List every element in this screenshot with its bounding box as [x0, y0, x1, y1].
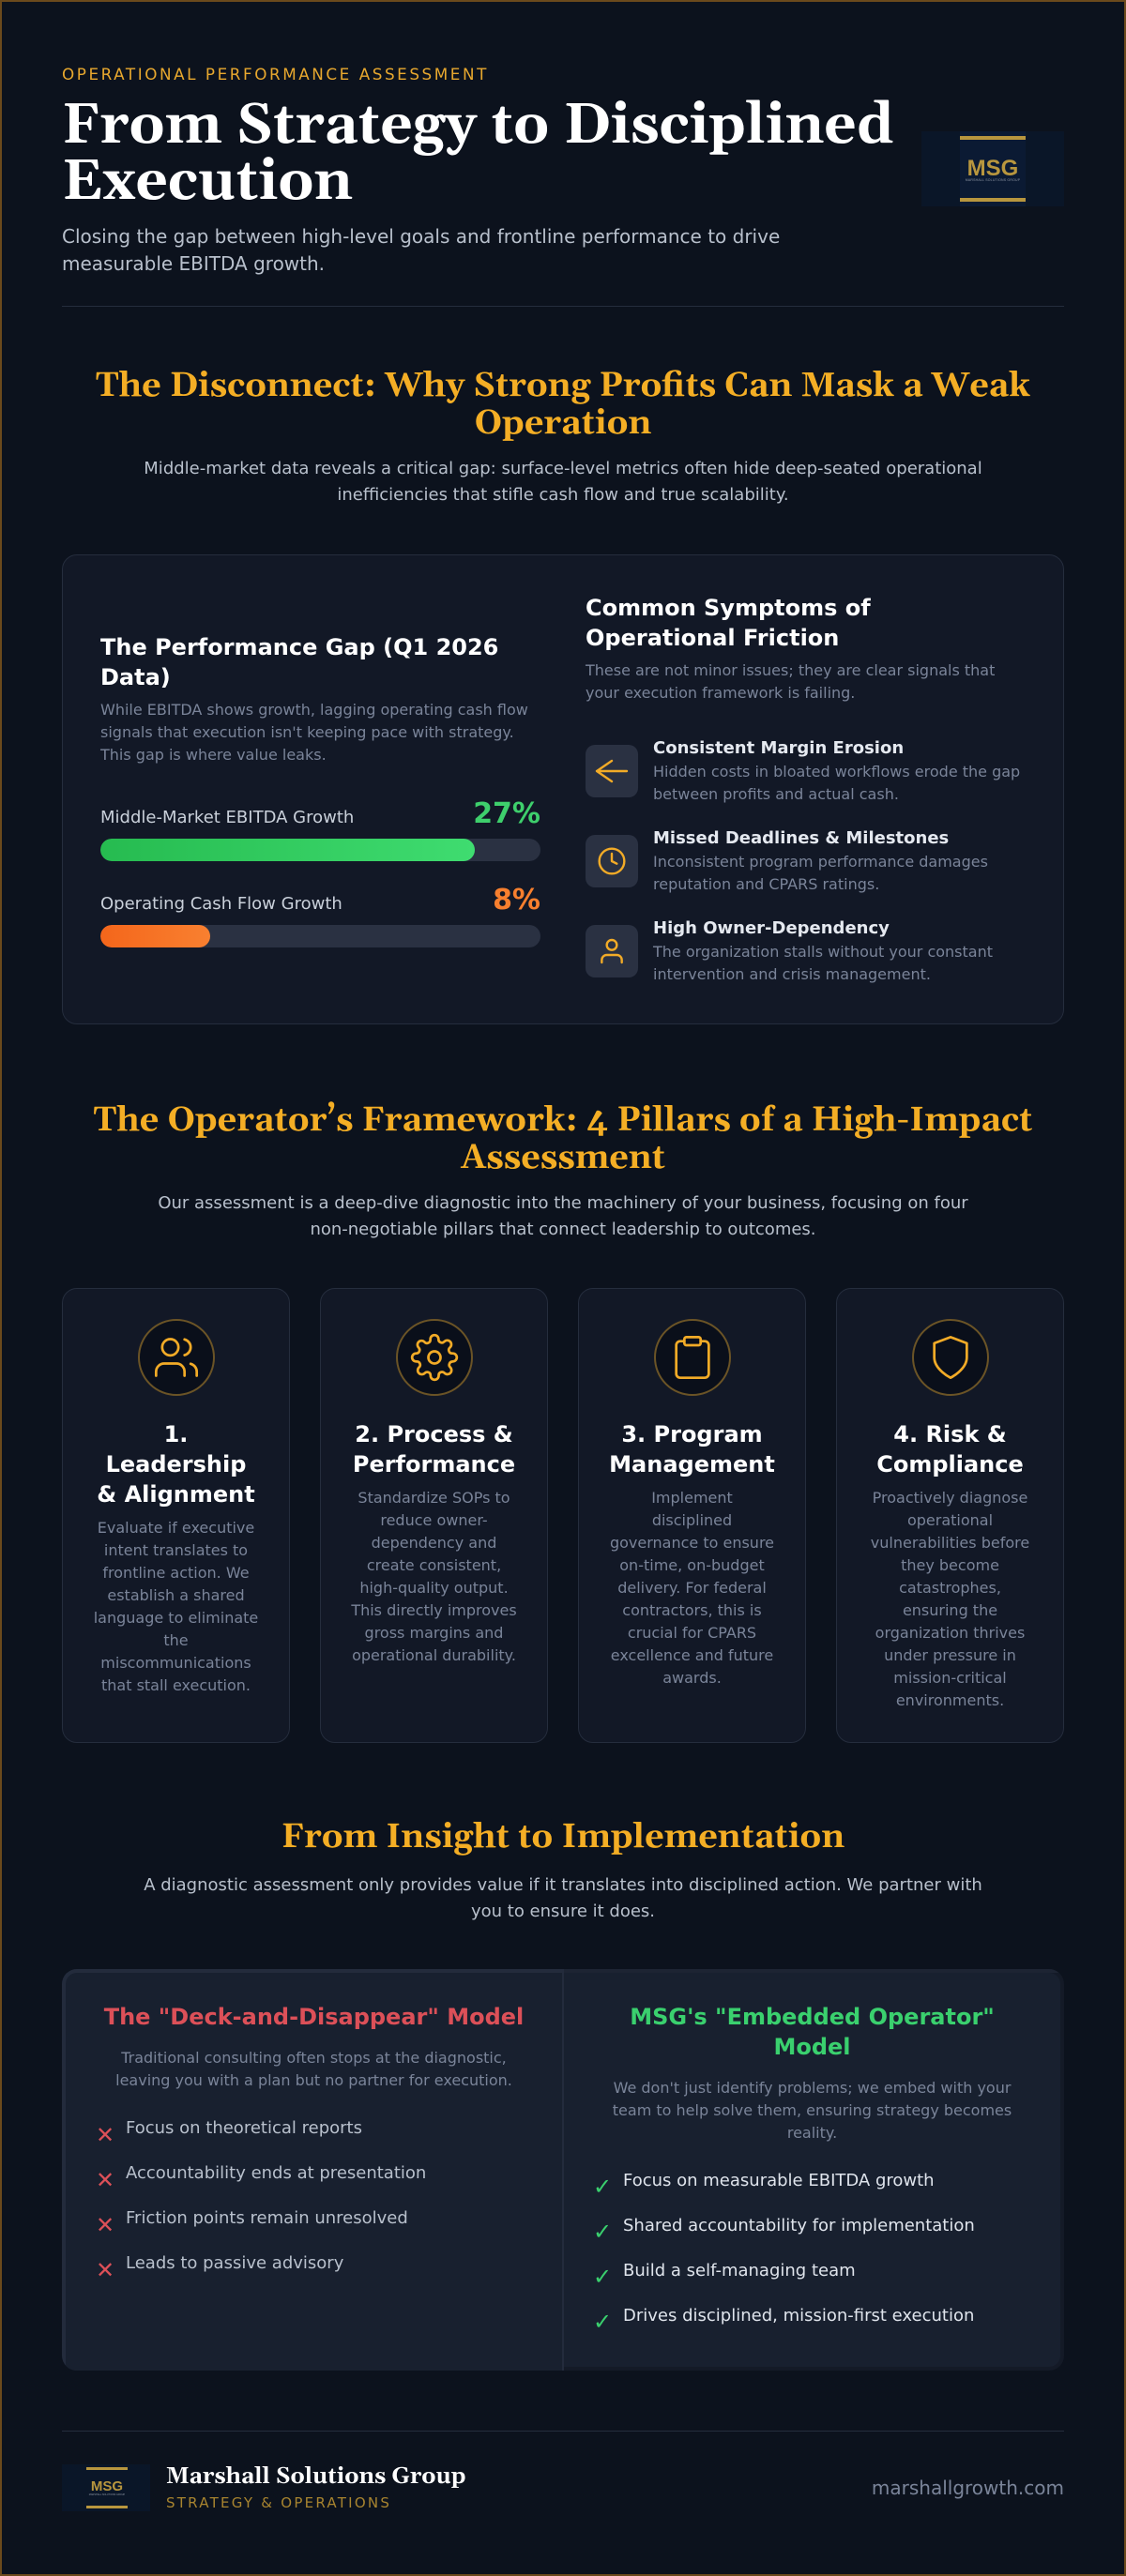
pillar text: establish a shared [107, 1586, 245, 1604]
list: ✕ [96, 2212, 114, 2238]
icon: clipboard [654, 1319, 731, 1396]
logo: MSG header [921, 131, 1064, 206]
pillar text: Evaluate if executive [98, 1519, 254, 1537]
symptom text: deadlines: reputation and CPARS ratings. [653, 875, 879, 893]
text: team to help solve them, ensuring strategy becomes [613, 2101, 1012, 2119]
list: Accountability ends at presentation [126, 2163, 426, 2183]
section heading: framework: Assessment [461, 1138, 665, 1180]
heading: The "Deck-and-Disappear" Model [104, 2004, 524, 2030]
symptom text: owner dependency: The organization stalls without your constant [653, 943, 993, 961]
pillar text: under pressure in [884, 1646, 1016, 1664]
section intro: the disconnect [144, 459, 982, 505]
pillar text: governance to ensure [610, 1534, 774, 1552]
pillar text: vulnerabilities before [871, 1534, 1029, 1552]
pillar heading: 1. [164, 1421, 188, 1447]
pillar text: organization thrives [875, 1624, 1025, 1642]
section intro: framework: non-negotiable pillars that connect leadership to outcomes. [310, 1220, 816, 1239]
pillar text [351, 1489, 517, 1664]
list [96, 2118, 426, 2283]
icon: users [138, 1319, 215, 1396]
title [62, 90, 893, 219]
icon: person [586, 925, 638, 977]
list: ✕ [96, 2122, 114, 2148]
footer tagline: STRATEGY & OPERATIONS [166, 2494, 391, 2511]
pillar text: gross margins and [365, 1624, 503, 1642]
text: leaving you with a plan but no partner for execution. [115, 2071, 512, 2089]
heading: MSG's "Embedded Operator" [630, 2004, 995, 2030]
pillar heading: & Alignment [97, 1481, 255, 1508]
performance gap text [99, 701, 528, 764]
list: Shared accountability for implementation [623, 2216, 975, 2235]
list: Friction points remain unresolved [126, 2208, 408, 2228]
performance gap text: While EBITDA shows growth, lagging operating cash flow [100, 701, 528, 719]
pillar text: dependency and [372, 1534, 496, 1552]
pillar heading: 2. Process & [355, 1421, 513, 1447]
text: reality. [787, 2124, 837, 2142]
bar: cash flow [100, 925, 540, 947]
pillar text: environments. [896, 1691, 1004, 1709]
symptoms text [586, 661, 995, 702]
pillar text: Standardize SOPs to [358, 1489, 510, 1507]
pillar text: high-quality output. [359, 1579, 509, 1597]
symptom title: deadlines: Missed Deadlines & Milestones [653, 828, 949, 848]
symptoms heading: Operational Friction [586, 625, 839, 651]
text: Traditional consulting often stops at the diagnostic, [121, 2049, 507, 2067]
pillar text: the [163, 1631, 189, 1649]
subtitle: Closing the gap between high-level goals and frontline performance to drive [62, 225, 780, 248]
pillar heading: Leadership [106, 1451, 246, 1477]
list: ✕ [96, 2257, 114, 2283]
pillar text: intent translates to [104, 1541, 248, 1559]
section heading: the disconnect: Operation [475, 403, 651, 446]
metric value: 27%: 27% [473, 797, 540, 830]
panel: performance gap and symptoms [62, 554, 1064, 1024]
metric label: cash flow: Operating Cash Flow Growth [100, 894, 342, 914]
heading [630, 2004, 995, 2060]
text [613, 2079, 1012, 2142]
text: We don't just identify problems; we embed with your [614, 2079, 1011, 2097]
pillar text [94, 1519, 258, 1694]
symptom text: margin erosion [653, 763, 1020, 803]
icon: shield [912, 1319, 989, 1396]
section intro: implementation: you to ensure it does. [471, 1902, 655, 1921]
pillar heading: Compliance [876, 1451, 1024, 1477]
section intro: the disconnect: Middle-market data reveals a critical gap: surface-level metrics often hide deep-seated operational [144, 459, 982, 478]
symptoms text: These are not minor issues; they are clear signals that [586, 661, 995, 679]
symptom title: margin erosion: Consistent Margin Erosion [653, 738, 904, 758]
pillar text: frontline action. We [102, 1564, 250, 1582]
list: ✓ [593, 2174, 612, 2200]
pillar text [610, 1489, 774, 1687]
section intro: the disconnect: inefficiencies that stifle cash flow and true scalability. [337, 485, 789, 505]
panel: pillar 2 [320, 1288, 548, 1743]
list: ✓ [593, 2264, 612, 2290]
pillar heading [609, 1421, 775, 1477]
panel: deck-and-disappear [96, 2004, 524, 2283]
pillar heading: Performance [353, 1451, 515, 1477]
section heading: implementation: From Insight to Implementation [282, 1817, 844, 1859]
section intro: implementation [144, 1875, 982, 1921]
panel: pillar 3 [578, 1288, 806, 1743]
metric label: EBITDA: Middle-Market EBITDA Growth [100, 808, 354, 827]
pillar text: disciplined [652, 1511, 732, 1529]
pillar heading [876, 1421, 1024, 1477]
pillar text: contractors, this is [622, 1601, 762, 1619]
symptom text: owner dependency: intervention and crisis management. [653, 965, 931, 983]
symptoms heading [586, 595, 871, 651]
pillar text: on-time, on-budget [619, 1556, 765, 1574]
panel: comparison [62, 1969, 1064, 2371]
logo: MSG footer: MSG [91, 2478, 123, 2494]
metric value: 8%: 8% [493, 884, 540, 917]
pillar text: awards. [662, 1669, 722, 1687]
pillar heading [353, 1421, 515, 1477]
pillar text: operational [907, 1511, 993, 1529]
performance gap heading: Data) [100, 664, 171, 690]
header eyebrow: OPERATIONAL PERFORMANCE ASSESSMENT [62, 65, 489, 83]
text [115, 2049, 512, 2089]
pillar text: ensuring the [903, 1601, 997, 1619]
subtitle [62, 225, 780, 275]
section heading: framework: The Operator’s Framework: 4 Pillars of a High-Impact [94, 1100, 1032, 1143]
heading: Model [773, 2034, 851, 2060]
list: Build a self-managing team [623, 2261, 856, 2281]
pillar text [871, 1489, 1029, 1709]
pillar heading: 4. Risk & [893, 1421, 1007, 1447]
list: Drives disciplined, mission-first execution [623, 2306, 974, 2326]
pillar text: Implement [651, 1489, 733, 1507]
pillar text: This directly improves [351, 1601, 517, 1619]
section intro: framework [158, 1193, 968, 1239]
pillar text: they become [901, 1556, 999, 1574]
symptom text: deadlines: Inconsistent program performance damages [653, 853, 988, 871]
symptom text: margin erosion: Hidden costs in bloated workflows erode the gap [653, 763, 1020, 780]
panel: pillar 4 [836, 1288, 1064, 1743]
pillar text: mission-critical [893, 1669, 1007, 1687]
pillar heading [97, 1421, 255, 1508]
performance gap heading [100, 634, 498, 690]
section intro: implementation: A diagnostic assessment only provides value if it translates into disciplined action. We partner with [144, 1875, 982, 1895]
subtitle: measurable EBITDA growth. [62, 252, 325, 275]
symptom title: owner dependency: High Owner-Dependency [653, 918, 890, 938]
footer url: marshallgrowth.com [872, 2477, 1064, 2499]
icon: arrow left [586, 745, 638, 797]
list: Focus on theoretical reports [126, 2118, 362, 2138]
panel: embedded operator [593, 2004, 1012, 2335]
list: ✓ [593, 2219, 612, 2245]
logo: MSG footer [62, 2464, 150, 2511]
list: Leads to passive advisory [126, 2253, 343, 2273]
list [593, 2171, 975, 2335]
icon: clock [586, 835, 638, 887]
section heading: the disconnect: The Disconnect: Why Strong Profits Can Mask a Weak [96, 366, 1030, 408]
pillar text: Proactively diagnose [873, 1489, 1027, 1507]
logo: MSG footer: MARSHALL SOLUTIONS GROUP [89, 2493, 125, 2496]
symptom text: owner dependency [653, 943, 993, 983]
performance gap text: This gap is where value leaks. [100, 746, 327, 764]
pillar text: language to eliminate [94, 1609, 258, 1627]
title: Execution [62, 146, 353, 219]
pillar text: excellence and future [611, 1646, 773, 1664]
bar: EBITDA [100, 839, 540, 861]
pillar text: reduce owner- [380, 1511, 488, 1529]
section heading: the disconnect [96, 366, 1030, 446]
pillar text: operational durability. [352, 1646, 516, 1664]
logo: MSG header: MARSHALL SOLUTIONS GROUP [966, 178, 1020, 182]
symptoms heading: Common Symptoms of [586, 595, 871, 621]
title: From Strategy to Disciplined [62, 90, 893, 162]
list: Focus on measurable EBITDA growth [623, 2171, 935, 2190]
performance gap heading: The Performance Gap (Q1 2026 [100, 634, 498, 660]
pillar text: crucial for CPARS [628, 1624, 756, 1642]
pillar heading: Management [609, 1451, 775, 1477]
pillar text: that stall execution. [101, 1676, 251, 1694]
list: ✓ [593, 2309, 612, 2335]
symptom text: deadlines [653, 853, 988, 893]
section intro: framework: Our assessment is a deep-dive diagnostic into the machinery of your business, focusing on four [158, 1193, 968, 1213]
section heading: framework [94, 1100, 1032, 1180]
pillar text: catastrophes, [899, 1579, 1001, 1597]
list: ✕ [96, 2167, 114, 2193]
footer company name: Marshall Solutions Group [166, 2463, 466, 2492]
icon: gear [396, 1319, 473, 1396]
performance gap text: signals that execution isn't keeping pace with strategy. [100, 723, 514, 741]
panel: pillar 1 [62, 1288, 290, 1743]
pillar text: create consistent, [367, 1556, 501, 1574]
pillar text: delivery. For federal [617, 1579, 767, 1597]
symptoms text: your execution framework is failing. [586, 684, 855, 702]
pillar heading: 3. Program [621, 1421, 763, 1447]
pillar text: miscommunications [100, 1654, 251, 1672]
logo: MSG header: MSG [967, 156, 1018, 181]
symptom text: margin erosion: between profits and actual cash. [653, 785, 899, 803]
